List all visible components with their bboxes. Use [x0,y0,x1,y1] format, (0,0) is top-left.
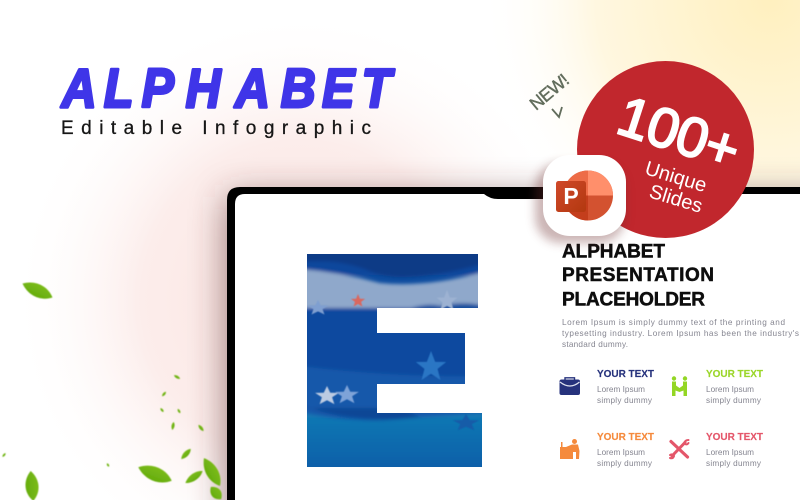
panel paragraph: Lorem Ipsum is simply dummy text of the printing and [562,318,785,327]
subtitle: Editable Infographic [61,118,371,139]
device frame [227,187,800,500]
title: ALPHABET [60,57,395,119]
panel heading [562,242,714,310]
leaves [2,278,225,500]
icon: PowerPoint logo: P [563,183,579,209]
item: orange [560,432,654,468]
device shadow [227,197,800,497]
icon shadow [535,163,625,243]
icon: briefcase [560,378,580,395]
badge: 100+ unique slides: Slides [646,181,705,218]
item: orange: YOUR TEXT [597,432,654,443]
panel heading: PLACEHOLDER [562,290,705,310]
item: navy [560,369,654,405]
handwritten new label: NEW! [526,70,573,114]
item: orange: Lorem Ipsum [597,448,645,457]
item: red: Lorem Ipsum [706,448,754,457]
panel heading: PRESENTATION [562,265,714,286]
icon: PowerPoint logo [543,155,626,236]
item: red: YOUR TEXT [706,432,763,443]
badge: 100+ unique slides: 100+ [610,83,748,182]
panel heading: ALPHABET [562,242,665,262]
item: green: YOUR TEXT [706,369,763,380]
icon: crossed tools [670,440,688,458]
icon: handshake [672,376,687,396]
item: navy: YOUR TEXT [597,369,654,380]
badge: 100+ unique slides: Unique [642,157,709,197]
icon: person at desk [560,439,580,459]
item: green: simply dummy [706,396,762,405]
item: navy: Lorem Ipsum [597,385,645,394]
panel paragraph: standard dummy. [562,340,628,349]
panel paragraph: typesetting industry. Lorem Ipsum has been the industry's [562,329,799,338]
item: navy: simply dummy [597,396,653,405]
panel paragraph [562,318,799,349]
item: green: Lorem Ipsum [706,385,754,394]
item: green [672,369,763,405]
letter E photo [307,254,482,467]
item: red: simply dummy [706,459,762,468]
item: red [670,432,763,468]
badge: 100+ unique slides [577,61,754,238]
item: orange: simply dummy [597,459,653,468]
